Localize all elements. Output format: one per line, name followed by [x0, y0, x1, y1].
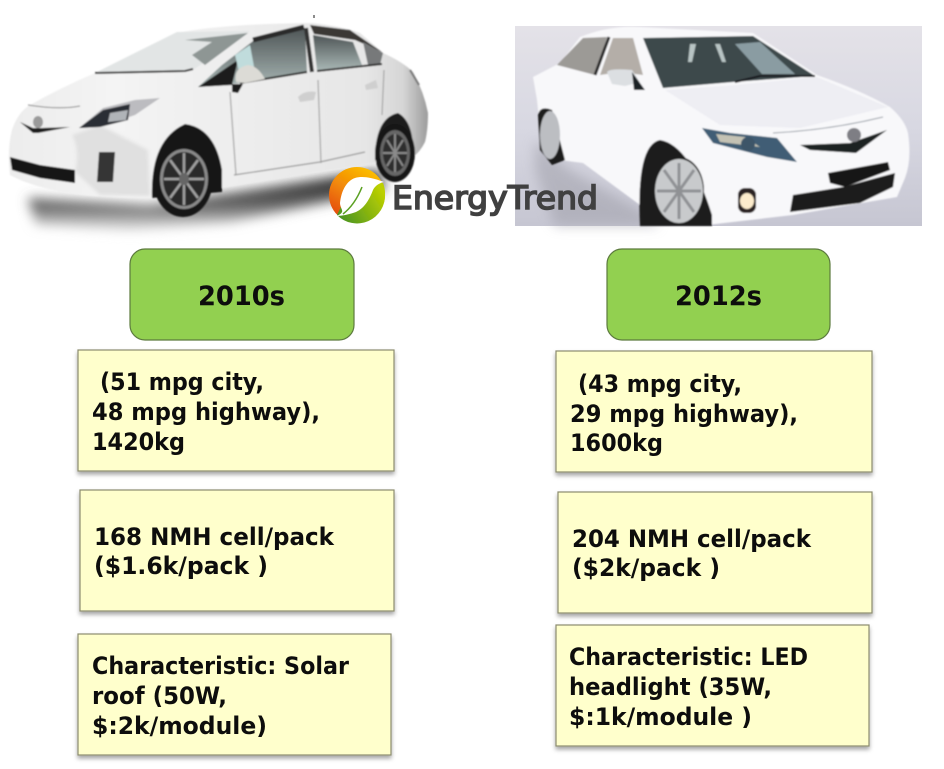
text box: 2012s battery pack: [558, 492, 872, 613]
watermark: EnergyTrend logo: [329, 167, 598, 223]
icon: leaf ring: [329, 167, 385, 223]
text box: 2012s characteristic: $:1k/module ): [569, 703, 752, 731]
wordmark: EnergyTrend: [392, 179, 598, 217]
text box: 2010s fuel economy and weight: (51 mpg city,: [100, 368, 264, 396]
text box: 2012s battery pack: ($2k/pack ): [572, 554, 720, 582]
text box: 2012s characteristic: headlight (35W,: [569, 673, 772, 701]
text box: 2010s fuel economy and weight: 1420kg: [92, 428, 185, 456]
heading: 2012s: [607, 249, 830, 340]
text box: 2010s fuel economy and weight: [78, 350, 394, 471]
text box: 2012s battery pack: 204 NMH cell/pack: [572, 525, 812, 553]
photo: 2010s Toyota Prius hatchback: [0, 0, 430, 236]
text box: 2010s battery pack: [80, 490, 394, 611]
photo: 2012s Toyota Camry hybrid sedan: [515, 26, 922, 226]
text box: 2010s battery pack: ($1.6k/pack ): [94, 552, 268, 580]
text box: 2010s characteristic: roof (50W,: [92, 682, 227, 710]
text box: 2012s fuel economy and weight: (43 mpg city,: [578, 370, 742, 398]
text box: 2010s fuel economy and weight: 48 mpg highway),: [92, 398, 320, 426]
heading: 2010s: [130, 249, 354, 340]
text box: 2010s characteristic: Characteristic: Solar: [92, 652, 349, 680]
text box: 2010s characteristic: [78, 634, 391, 755]
heading: 2010s: 2010s: [198, 281, 285, 312]
text box: 2010s battery pack: 168 NMH cell/pack: [94, 523, 335, 551]
text box: 2012s characteristic: [556, 625, 869, 746]
text box: 2012s fuel economy and weight: 1600kg: [570, 429, 663, 457]
text box: 2010s characteristic: $:2k/module): [92, 712, 267, 740]
heading: 2012s: 2012s: [675, 281, 762, 312]
text box: 2012s fuel economy and weight: [556, 351, 872, 472]
text box: 2012s characteristic: Characteristic: LED: [569, 643, 808, 671]
text box: 2012s fuel economy and weight: 29 mpg highway),: [570, 400, 798, 428]
